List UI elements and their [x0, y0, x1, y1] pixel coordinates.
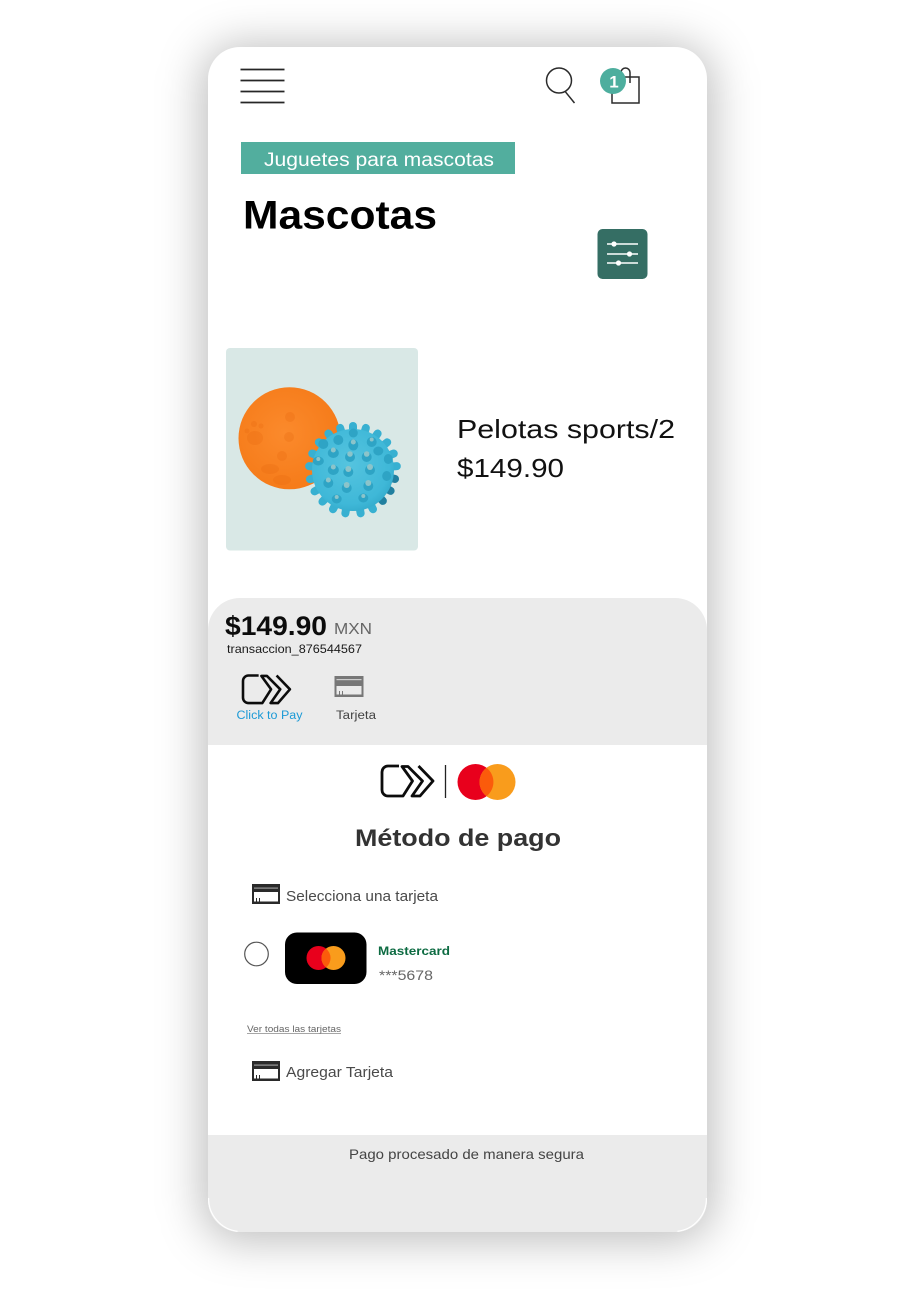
orange ball [238, 387, 340, 489]
heading: payment method: Método de pago [355, 825, 561, 852]
label: select card: Selecciona una tarjeta [286, 889, 439, 905]
page title: Mascotas [243, 194, 437, 238]
category tag: Juguetes para mascotas [264, 150, 494, 171]
icon: shopping bag with badge [600, 68, 639, 103]
product name: Pelotas sports/2 [457, 414, 675, 444]
saved card [285, 932, 366, 984]
phone shadow [202, 45, 713, 1241]
radio button [245, 942, 268, 966]
product price: $149.90 [457, 453, 564, 483]
currency: MXN [334, 621, 372, 638]
panel: payment summary [208, 598, 707, 745]
product image: toy balls [226, 348, 418, 550]
transaction id: transaccion_876544567 [227, 642, 362, 656]
icon: Click to Pay [243, 676, 290, 703]
footer text: Pago procesado de manera segura [349, 1146, 584, 1162]
icon: filter button [598, 229, 648, 279]
total amount: $149.90 [225, 611, 327, 641]
icon: card [334, 676, 364, 697]
phone screen [208, 47, 707, 1232]
blue spiky ball [309, 426, 397, 513]
label: Click to Pay: Click to Pay [236, 710, 303, 722]
card brand: Mastercard [378, 944, 450, 958]
label: add card: Agregar Tarjeta [286, 1065, 394, 1081]
label: Tarjeta: Tarjeta [336, 710, 377, 722]
link: view all cards: Ver todas las tarjetas [247, 1024, 342, 1034]
icon: hamburger menu [240, 70, 284, 102]
logos: Click to Pay and Mastercard [382, 764, 516, 800]
icon: card select [252, 884, 280, 904]
icon: card add [252, 1061, 280, 1081]
category tag [241, 142, 515, 174]
card number: ***5678 [379, 967, 433, 983]
footer panel [208, 1135, 707, 1232]
icon: search [546, 68, 574, 103]
icon: shopping bag with badge: 1 [609, 72, 619, 92]
